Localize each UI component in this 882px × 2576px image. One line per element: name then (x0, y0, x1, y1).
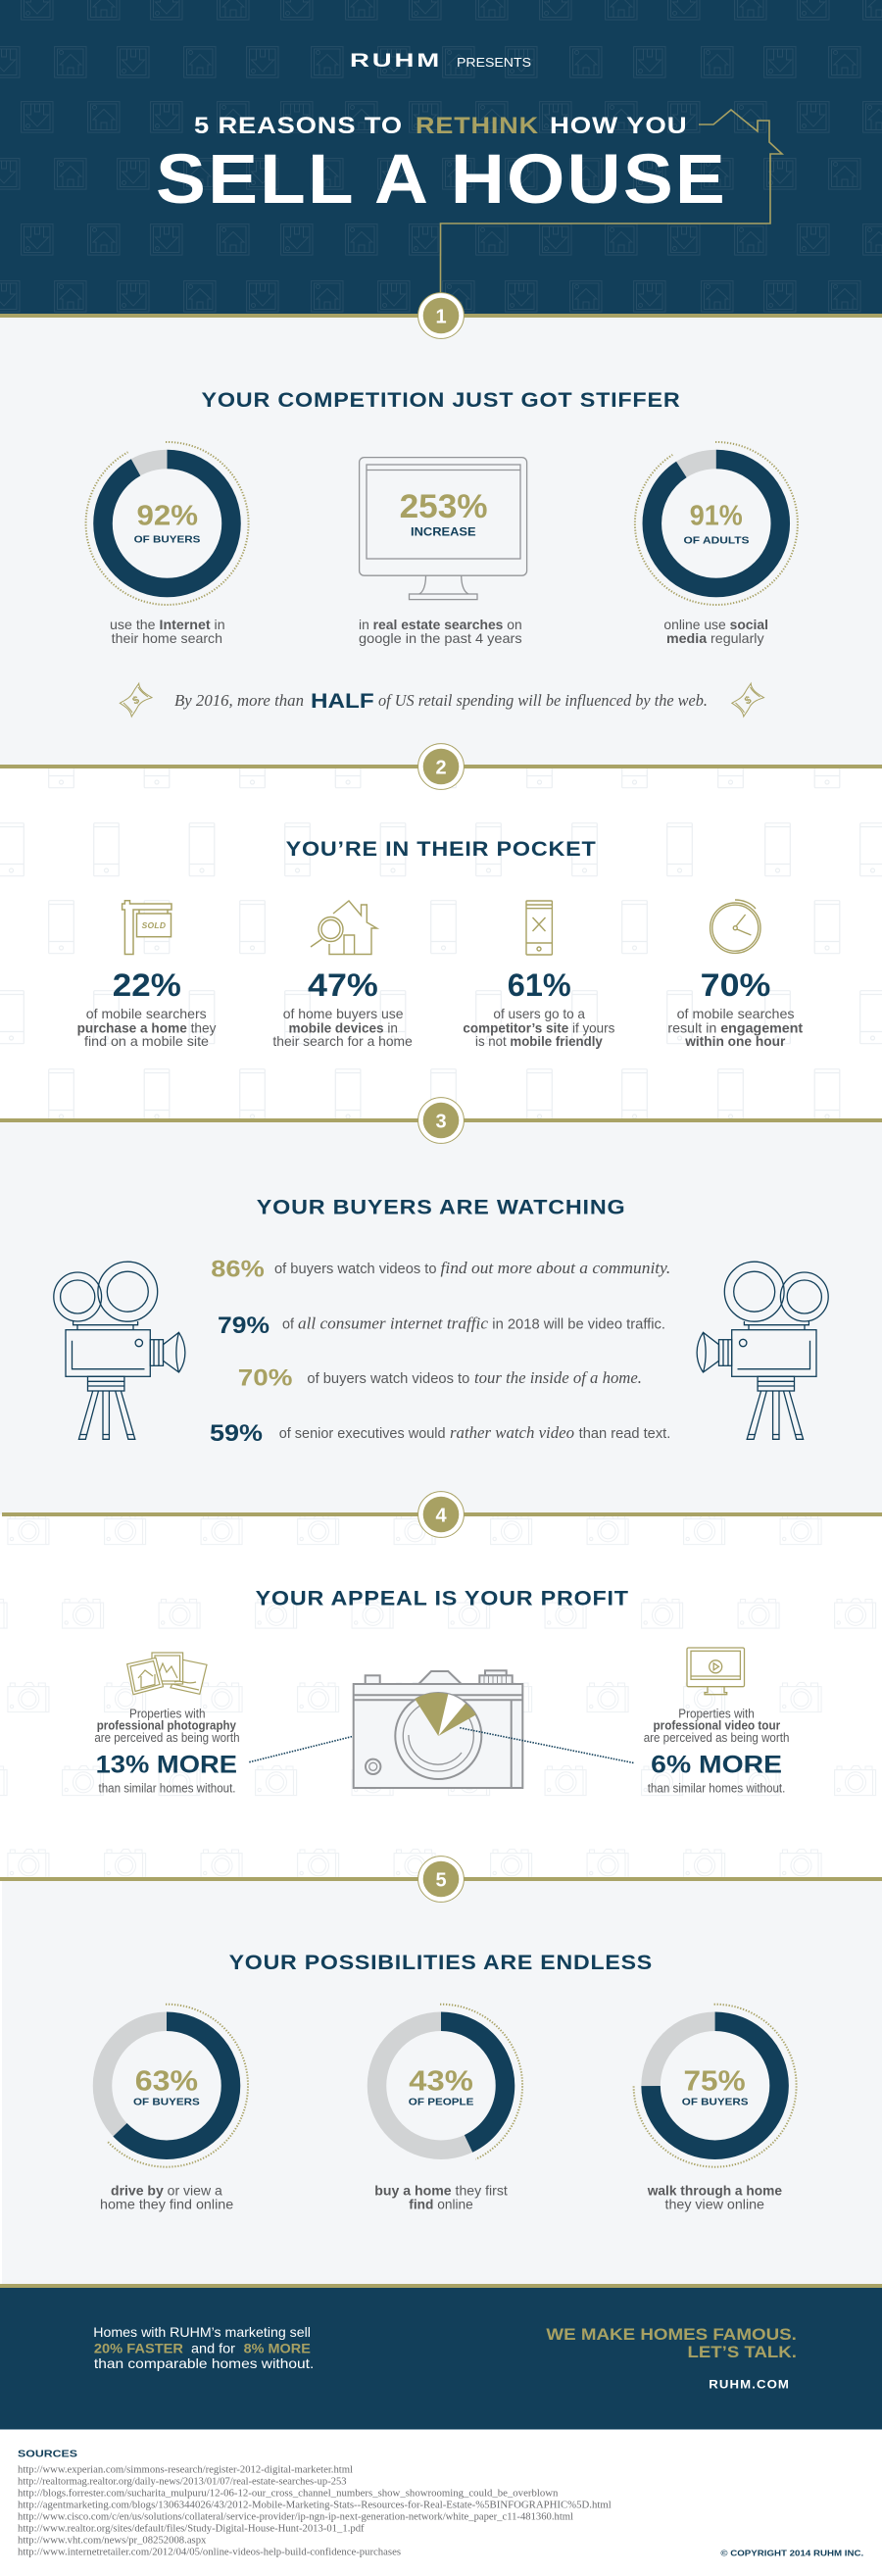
stat: 79% traffic: of (282, 1317, 295, 1333)
panel: sources (18, 2450, 863, 2557)
title line: HOW YOU (550, 113, 688, 139)
icon: money left: $ (131, 694, 141, 708)
donut chart: 43% of people: OF PEOPLE (409, 2096, 473, 2107)
stat: 70% tour: tour the inside of a home. (474, 1368, 642, 1387)
caption: their home search (112, 630, 222, 646)
text: marketing claim: 8% MORE (244, 2341, 311, 2356)
stat: 22% (77, 967, 216, 1049)
stat: 61%: is not mobile friendly (475, 1033, 603, 1049)
copyright: © COPYRIGHT 2014 RUHM INC. (720, 2548, 863, 2557)
stat: 86% community (211, 1257, 670, 1283)
stat: 47% (272, 967, 413, 1049)
logo: RUHM presents (350, 50, 531, 72)
source list: http://realtormag.realtor.org/daily-news/2013/01/07/real-estate-searches-up-253 (18, 2475, 347, 2487)
source list: http://agentmarketing.com/blogs/1306344026/43/2012-Mobile-Marketing-Stats--Resources-for-Real-Estate-%5BINFOGRAPHIC%5D.html (18, 2499, 612, 2510)
title line: RETHINK (416, 113, 539, 139)
badge 5: 5 (435, 1870, 447, 1892)
source list: http://www.cisco.com/c/en/us/solutions/collateral/service-provider/ip-ngn-ip-next-generation-network/white_paper_c11-481360.html (18, 2510, 573, 2522)
dotted connector right (460, 1728, 635, 1763)
donut chart: 92% of buyers: OF BUYERS (134, 533, 200, 545)
donut chart: 75% of buyers (634, 2005, 797, 2167)
panel: header (0, 0, 882, 316)
stat: 79% traffic: all consumer internet traffic (298, 1314, 488, 1333)
quote: half of retail spending: HALF (311, 690, 374, 713)
source list (18, 2463, 612, 2557)
caption (110, 617, 225, 646)
caption: find online (409, 2197, 473, 2212)
logo: RUHM presents: RUHM (350, 50, 442, 72)
text: photography: 13% MORE (96, 1752, 237, 1779)
caption (359, 617, 522, 646)
donut chart: 63% of buyers: 63% (135, 2065, 198, 2097)
panel: appeal (94, 1587, 789, 1795)
stat: 22%: purchase a home they (77, 1019, 216, 1035)
source list: http://www.realtor.org/sites/default/files/Study-Digital-House-Hunt-2013-01_1.pdf (18, 2522, 365, 2534)
icon: money right: $ (743, 694, 754, 708)
stat: 70%: 70% (701, 967, 770, 1003)
text: slogan (546, 2325, 797, 2361)
title main: SELL A HOUSE (156, 141, 727, 219)
caption (374, 2183, 508, 2212)
text: marketing claim: and for (191, 2341, 235, 2356)
panel: watching (54, 1196, 828, 1447)
caption: drive by or view a (111, 2183, 222, 2199)
dotted connector left (249, 1718, 424, 1762)
icon: video monitor (687, 1648, 745, 1695)
caption (647, 2183, 782, 2212)
stat: 61%: of users go to a (493, 1006, 585, 1021)
badge 5 (418, 1857, 464, 1902)
stat: 47%: their search for a home (272, 1033, 413, 1049)
panel: section 3 background (0, 1121, 882, 1514)
badge 3 (418, 1098, 464, 1143)
icon: money left (120, 683, 152, 717)
caption: media regularly (666, 630, 764, 646)
text: photography: Properties with (129, 1708, 206, 1721)
source list: http://www.experian.com/simmons-research/register-2012-digital-marketer.html (18, 2463, 353, 2475)
quote: half of retail spending: By 2016, more than (174, 691, 304, 710)
icon: film camera right (697, 1262, 828, 1439)
caption (100, 2183, 233, 2212)
stat: 70% tour: of buyers watch videos to (307, 1371, 469, 1387)
stat: 47%: of home buyers use (283, 1006, 404, 1021)
caption: use the Internet in (110, 617, 225, 632)
stat: 59% executives: rather watch video (450, 1423, 574, 1442)
stat: 79% traffic: in 2018 will be video traffic. (492, 1317, 665, 1333)
stat: 79% traffic (218, 1313, 665, 1339)
stat: 59% executives: of senior executives would (279, 1426, 446, 1442)
text: photography: than similar homes without. (98, 1781, 235, 1795)
badge 3: 3 (435, 1112, 447, 1133)
icon: money right (732, 683, 764, 717)
stat: 61%: competitor’s site if yours (463, 1019, 614, 1035)
stat: 70%: of mobile searches (677, 1006, 795, 1021)
heading: YOUR POSSIBILITIES ARE ENDLESS (229, 1952, 653, 1974)
text: photography (94, 1708, 240, 1795)
stat: 47%: 47% (308, 967, 378, 1003)
donut chart: 43% of people (376, 2005, 522, 2159)
icon: sold sign (122, 901, 172, 955)
source list: http://blogs.forrester.com/sucharita_mulpuru/12-06-12-our_cross_channel_numbers_show_showrooming_could_be_overblown (18, 2487, 559, 2499)
donut chart: 75% of buyers: 75% (684, 2065, 746, 2097)
badge 2 (418, 744, 464, 789)
icon: camera with wedges (354, 1670, 522, 1788)
panel: pocket (77, 838, 804, 1049)
panel: section 5 background (2, 1881, 882, 2285)
caption: buy a home they first (374, 2183, 508, 2199)
badge 4: 4 (435, 1506, 447, 1527)
caption: online use social (663, 617, 768, 632)
text: video tour: than similar homes without. (648, 1781, 785, 1795)
stat: 47%: mobile devices in (288, 1019, 398, 1035)
donut chart: 92% of buyers: 92% (137, 501, 198, 532)
text: video tour (644, 1708, 789, 1795)
donut chart: 63% of buyers: OF BUYERS (133, 2096, 200, 2107)
icon: house with magnifier (311, 901, 377, 955)
icon: sold sign: SOLD (142, 920, 166, 930)
icon: phone with x (526, 901, 552, 955)
stat: 79% traffic: 79% (218, 1313, 270, 1339)
stat: 70%: result in engagement (667, 1019, 804, 1035)
stat: 70% tour (238, 1364, 642, 1391)
badge 4 (418, 1492, 464, 1537)
icon: photographs (127, 1653, 207, 1695)
source list: http://www.internetretailer.com/2012/04/05/online-videos-help-build-confidence-purchases (18, 2546, 401, 2557)
caption: in real estate searches on (359, 617, 522, 632)
stat: 86% community: 86% (211, 1257, 265, 1283)
stat: 86% community: of buyers watch videos to (274, 1262, 437, 1277)
house outline connector (441, 110, 782, 293)
icon: film camera left (54, 1262, 185, 1439)
panel: competition (86, 389, 798, 717)
donut chart: 75% of buyers: OF BUYERS (682, 2096, 749, 2107)
heading: YOUR BUYERS ARE WATCHING (257, 1196, 625, 1218)
caption: google in the past 4 years (359, 630, 522, 646)
stat: 59% executives: than read text. (579, 1426, 670, 1442)
text: photography: professional photography (97, 1719, 236, 1733)
text: video tour: Properties with (678, 1708, 755, 1721)
caption: home they find online (100, 2197, 233, 2212)
donut chart: 92% of buyers (86, 442, 249, 605)
panel: footer call to action (0, 2288, 882, 2430)
icon: stopwatch (710, 900, 760, 953)
text: marketing claim: than comparable homes without. (94, 2355, 314, 2371)
text: video tour: are perceived as being worth (644, 1731, 789, 1745)
badge 1 (418, 293, 464, 338)
stat: 22%: of mobile searchers (86, 1006, 207, 1021)
text: video tour: 6% MORE (651, 1752, 782, 1779)
heading: YOU’RE IN THEIR POCKET (286, 838, 597, 861)
text: marketing claim: 20% FASTER (94, 2341, 183, 2356)
heading: YOUR COMPETITION JUST GOT STIFFER (202, 389, 680, 412)
stat: 61% (463, 967, 614, 1049)
text: slogan: WE MAKE HOMES FAMOUS. (546, 2325, 797, 2344)
panel: possibilities (100, 1952, 797, 2212)
heading: SOURCES (18, 2450, 77, 2460)
donut chart: 43% of people: 43% (409, 2065, 473, 2097)
title line: 5 REASONS TO (194, 113, 403, 139)
donut chart: 91% of adults: OF ADULTS (684, 534, 749, 546)
title line (194, 113, 688, 139)
stat: 59% executives (210, 1420, 670, 1447)
donut chart: 91% of adults: 91% (690, 501, 743, 532)
donut chart: 91% of adults (635, 442, 798, 605)
stat: 61%: 61% (508, 967, 571, 1003)
badge 1: 1 (435, 306, 447, 327)
quote: half of retail spending: of US retail spending will be influenced by the web. (378, 691, 708, 710)
quote: half of retail spending (174, 690, 708, 713)
stat: 70% (667, 967, 804, 1049)
caption: they view online (664, 2197, 764, 2212)
text: website: RUHM.COM (709, 2378, 790, 2392)
text: marketing claim: Homes with RUHM’s marketing sell (93, 2324, 311, 2340)
stat: 70% tour: 70% (238, 1364, 292, 1391)
text: slogan: LET’S TALK. (688, 2343, 797, 2361)
stat: 22%: 22% (113, 967, 181, 1003)
caption: walk through a home (647, 2183, 782, 2199)
heading: YOUR APPEAL IS YOUR PROFIT (256, 1587, 629, 1610)
panel: section 1 background (0, 318, 882, 766)
monitor with 253% increase: 253% (400, 488, 488, 525)
monitor with 253% increase (360, 458, 527, 600)
monitor with 253% increase: INCREASE (411, 526, 476, 538)
badge 2: 2 (435, 757, 447, 778)
donut chart: 63% of buyers (102, 2005, 248, 2167)
caption (663, 617, 768, 646)
source list: http://www.vht.com/news/pr_08252008.aspx (18, 2534, 207, 2546)
stat: 22%: find on a mobile site (84, 1033, 209, 1049)
stat: 70%: within one hour (684, 1033, 786, 1049)
logo: RUHM presents: PRESENTS (457, 56, 531, 70)
text: photography: are perceived as being worth (94, 1731, 240, 1745)
stat: 59% executives: 59% (210, 1420, 263, 1447)
text: marketing claim (93, 2324, 314, 2371)
text: video tour: professional video tour (653, 1719, 780, 1733)
stat: 86% community: find out more about a community. (441, 1259, 670, 1277)
